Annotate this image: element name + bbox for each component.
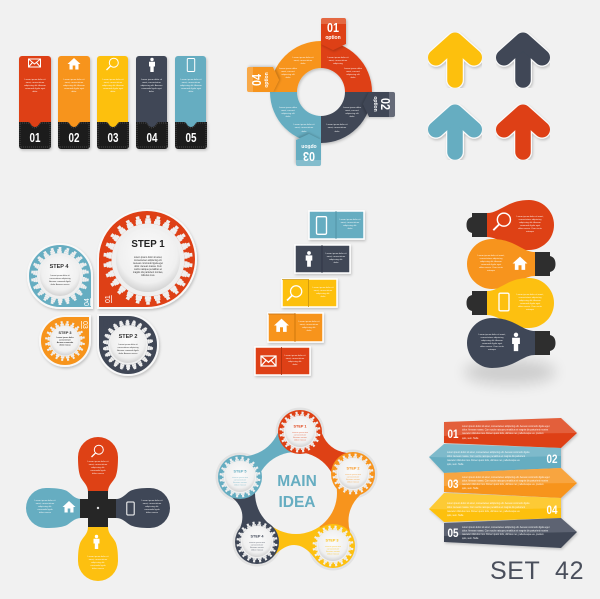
- tag 02: [58, 56, 90, 149]
- step 3 node: [311, 524, 355, 568]
- option tab 01: 01: [327, 20, 339, 35]
- ring labels: adipiscing elit: [281, 73, 295, 76]
- step 4 gear: consectetuer adipiscing: [50, 277, 70, 280]
- ribbon 02: [429, 444, 561, 473]
- connecting bands: [232, 432, 360, 558]
- bulb: red search: natoque: [526, 230, 535, 233]
- card: phone: dolor: [348, 227, 353, 230]
- petal: red search: Lorem ipsum dolor sit: [88, 460, 109, 463]
- node halos: [216, 408, 378, 570]
- petal: red search: [78, 437, 118, 492]
- ribbon 02: quis, sem. Nulla: [447, 464, 464, 466]
- tag 04: 04: [146, 131, 158, 145]
- petal: teal home: [26, 488, 81, 528]
- step 1 gear: magnis dis parturient montes,: [133, 271, 163, 274]
- step 1 node: Lorem ipsum dol: [292, 432, 308, 434]
- ribbon 01: [444, 418, 577, 448]
- card: home: [268, 313, 323, 342]
- card: mail: dolor: [293, 363, 298, 366]
- bulb: red search: Lorem ipsum dolor sit amet,: [516, 215, 544, 218]
- center blob: [255, 452, 337, 534]
- panel: circular four options chart: [247, 18, 395, 166]
- ribbon 03: dolor. Aenean massa. Cum sociis natoque penatibus et magnis dis parturient montes: [462, 480, 549, 482]
- petal: yellow person: dolor massa: [92, 567, 105, 570]
- card: phone: Lorem ipsum dolor sit: [340, 218, 361, 221]
- ring labels: amet, consectetuer: [294, 59, 313, 62]
- tag 04: dolor.: [149, 90, 155, 93]
- step 4 node: dolor massa: [251, 550, 264, 552]
- card: search: [282, 279, 337, 307]
- step 2 gear: Lorem ipsum dolor sit: [118, 343, 138, 346]
- tag 02: amet, consectetuer: [65, 81, 84, 84]
- step 4 gear: Aenean commodo ligula: [49, 280, 72, 283]
- ring labels: amet, consect: [281, 109, 295, 112]
- step 2 node: [331, 452, 375, 496]
- ring labels: amet, consectetuer: [328, 126, 347, 129]
- bulb shadow: [464, 359, 556, 385]
- ribbon 02: nascetur ridiculus mus. Donec quam felis, ultricies nec, pellentesque eu: [447, 459, 520, 462]
- ring segments: [270, 41, 372, 143]
- card: person: [295, 245, 350, 273]
- step 4 gear: [28, 244, 92, 308]
- step 1 gear: ridiculus mus.: [141, 274, 155, 277]
- tag 04: commodo ligula eget: [141, 87, 162, 90]
- bulb: orange home: adipiscing elit. Aenean: [480, 260, 503, 263]
- step 5 node: consectetuer: [234, 478, 246, 482]
- tag 02: dolor.: [71, 90, 77, 93]
- tag 03: commodo ligula eget: [103, 87, 123, 90]
- ribbon 05: 05: [448, 526, 459, 540]
- step 3 gear: Aenean commodo: [57, 341, 74, 344]
- arrow: teal: [436, 112, 474, 152]
- step 2 node: Lorem ipsum dol: [345, 474, 361, 476]
- step 3 node: dolor massa: [327, 554, 340, 556]
- option tab 02: [363, 92, 395, 117]
- ring labels: Lorem ipsum dolor: [279, 106, 297, 109]
- step 4 node: Aenean comm: [250, 546, 264, 549]
- ring labels: Lorem ipsum dolor sit: [327, 123, 348, 126]
- ring labels: [279, 56, 362, 133]
- tag 05: amet, consectetuer: [182, 81, 201, 84]
- option tab 01: option: [325, 35, 341, 41]
- ribbon 01: quis, sem. Nulla: [462, 438, 479, 440]
- panel: staircase cards: [255, 211, 364, 375]
- ring labels: Lorem ipsum dolor sit: [293, 56, 314, 59]
- ribbon 01: Lorem ipsum dolor sit amet, consectetuer adipiscing elit. Aenean commodo ligula eget: [462, 425, 550, 428]
- step 1 gear: 01: [105, 295, 112, 303]
- tag 03: 03: [108, 131, 119, 145]
- ring labels: dolor: [351, 76, 356, 79]
- step 1 gear: Lorem ipsum dolor sit amet,: [134, 256, 163, 259]
- option tab 03: 03: [303, 149, 315, 164]
- petal: red search: commodo ligula: [90, 470, 106, 472]
- tag 01: 01: [30, 131, 41, 145]
- bulb: red search: [466, 200, 554, 250]
- tag 01: [19, 56, 51, 149]
- ring labels: dolor: [350, 115, 355, 118]
- step 4 gear: dolor. Aenean massa: [51, 283, 70, 286]
- panel: cross of petals: [26, 437, 170, 581]
- tag 03: Lorem ipsum dolor sit: [103, 78, 124, 81]
- ring labels: amet, consect: [345, 109, 359, 112]
- ring labels: Lorem ipsum dolor: [279, 67, 297, 70]
- bulb: dark person: commodo ligula eget: [482, 342, 502, 345]
- step 2 gear: 02: [103, 319, 110, 327]
- petal: dark phone: [116, 488, 170, 528]
- option tab 01: [321, 18, 346, 50]
- bulb: orange home: consectetuer adipiscing: [480, 257, 503, 260]
- tag 05: [175, 56, 207, 149]
- panel: light bulbs: [464, 200, 556, 385]
- ribbon 01: dolor. Aenean massa. Cum sociis natoque penatibus et magnis dis parturient montes: [462, 428, 549, 432]
- card: home: adipiscing elit.: [302, 326, 316, 329]
- bulb: yellow phone: adipiscing elit. Aenean: [519, 299, 542, 302]
- bulb: dark person: Lorem ipsum dolor sit amet,: [478, 333, 506, 336]
- bulb: yellow phone: dolor massa. Cum sociis: [518, 305, 543, 308]
- step 2 gear: STEP 2: [119, 334, 137, 340]
- card: home: Lorem ipsum dolor sit: [299, 320, 320, 323]
- step 3 gear: consectetuer: [59, 338, 71, 342]
- step 1 gear: dolor. Aenean massa. Cum: [134, 265, 162, 268]
- bulb: dark person: dolor massa. Cum sociis: [480, 345, 505, 348]
- step 1 gear: STEP 1: [131, 239, 165, 250]
- step 1 node: Aenean comm: [293, 436, 307, 439]
- ring labels: dolor: [335, 130, 340, 133]
- ring labels: adipiscing elit: [345, 112, 359, 115]
- bulb: orange home: Lorem ipsum dolor sit amet,: [478, 254, 505, 257]
- arrow: yellow: [436, 40, 474, 80]
- tag 05: dolor.: [188, 90, 194, 93]
- step 4 gear: 04: [84, 298, 91, 306]
- tag 04: [136, 56, 168, 149]
- ribbon 04: dolor. Aenean massa. Cum sociis natoque penatibus et magnis dis parturient: [447, 506, 525, 509]
- ribbon 03: 03: [448, 477, 459, 491]
- ribbon 05: [444, 518, 577, 548]
- bulb: red search: consectetuer adipiscing: [519, 218, 542, 221]
- step 3 node: Lorem ipsum dol: [325, 546, 341, 548]
- step 2 node: dolor massa: [347, 482, 360, 484]
- main idea label: MAIN: [277, 473, 317, 490]
- ring labels: Lorem ipsum dolor: [344, 67, 362, 70]
- option tab 02: 02: [378, 98, 393, 110]
- ring labels: dolor: [286, 115, 291, 118]
- tag 02: commodo ligula eget: [64, 87, 84, 90]
- bulb: yellow phone: Lorem ipsum dolor sit amet,: [516, 293, 544, 296]
- step 3 gear: dolor massa: [59, 344, 72, 346]
- ring labels: amet, consectetuer: [329, 59, 348, 62]
- ring labels: dolor: [286, 76, 291, 79]
- step 2 node: STEP 2: [346, 466, 360, 470]
- card: search: Lorem ipsum dolor sit: [313, 286, 334, 289]
- ribbon 01: nascetur ridiculus mus. Donec quam felis, ultricies nec, pellentesque eu, pretium: [462, 432, 544, 435]
- step 3 node: consectetuer: [327, 548, 339, 550]
- tag 03: amet, consectetuer: [104, 81, 123, 84]
- ribbon 03: quis, sem. Nulla: [462, 488, 479, 490]
- ribbon 04: [429, 493, 561, 522]
- card: home: amet, consectetuer: [300, 323, 319, 326]
- arrow: dark: [504, 40, 542, 80]
- step 2 node: Aenean comm: [346, 478, 360, 481]
- bulb: red search: commodo ligula eget: [520, 224, 540, 227]
- bulb: orange home: natoque: [487, 269, 496, 272]
- petal: yellow person: commodo ligula: [90, 565, 106, 567]
- ring labels: adipiscing elit: [281, 112, 295, 115]
- petal: yellow person: amet, consectetuer: [89, 558, 108, 561]
- petal: teal home: commodo ligula: [37, 509, 53, 511]
- ribbon 03: nascetur ridiculus mus. Donec quam felis, ultricies nec, pellentesque eu, pretium: [462, 483, 544, 486]
- step 3 gear: Lorem ipsum dolor: [56, 337, 74, 339]
- petal: yellow person: adipiscing elit.: [91, 561, 105, 564]
- step 4 node: consectetuer: [251, 544, 263, 546]
- step 1 node: consectetuer: [294, 434, 306, 436]
- step 3 gear: [40, 316, 90, 366]
- panel: four arrows: [436, 40, 542, 152]
- option tab 03: option: [301, 143, 317, 149]
- tag 05: commodo ligula eget: [181, 87, 201, 90]
- step 2 gear: consectetuer adipiscing: [118, 346, 138, 349]
- ribbon 02: dolor. Aenean massa. Cum sociis natoque penatibus et magnis dis parturient: [447, 455, 525, 458]
- bulb: yellow phone: natoque: [526, 308, 535, 311]
- card: person: amet, consectetuer: [327, 255, 346, 258]
- tag 04: Lorem ipsum dolor sit: [141, 78, 162, 81]
- step 5 node: Aenean comm: [233, 481, 247, 484]
- step 3 node: Aenean comm: [326, 550, 340, 553]
- step 1 gear: sociis natoque penatibus et: [134, 268, 162, 271]
- petal: teal home: Lorem ipsum dolor sit: [35, 499, 56, 502]
- step 2 node: consectetuer: [347, 476, 359, 478]
- panel: ribbon arrows: [429, 418, 577, 548]
- bulb: red search: adipiscing elit. Aenean: [519, 221, 542, 224]
- card: mail: amet, consectetuer: [286, 357, 305, 360]
- ring labels: Lorem ipsum dolor sit: [328, 56, 349, 59]
- petal: yellow person: [78, 527, 118, 581]
- bulb: dark person: adipiscing elit. Aenean: [481, 339, 504, 342]
- ribbon 04: nascetur ridiculus mus. Donec quam felis, ultricies nec, pellentesque eu: [447, 510, 520, 513]
- step 5 node: STEP 5: [233, 470, 247, 474]
- ribbon 04: 04: [546, 503, 558, 517]
- step 3 gear: STEP 3: [58, 331, 72, 335]
- tag 03: dolor.: [110, 90, 116, 93]
- step 1 node: [278, 410, 322, 454]
- ring labels: amet, consect: [346, 70, 360, 73]
- tag 03: [97, 56, 129, 149]
- option tab 02: option: [372, 96, 378, 112]
- tag 01: Lorem ipsum dolor sit: [25, 78, 46, 81]
- step 2 gear: dolor. Aenean massa: [119, 352, 138, 355]
- petal: red search: amet, consectetuer: [89, 463, 108, 466]
- petal: teal home: amet, consectetuer: [36, 502, 55, 505]
- bulb: dark person: consectetuer adipiscing: [481, 336, 504, 339]
- card: person: Lorem ipsum dolor sit: [326, 252, 347, 255]
- step 1 node: dolor massa: [294, 440, 307, 442]
- ribbon 05: dolor. Aenean massa. Cum sociis natoque penatibus et magnis dis parturient montes: [462, 530, 549, 532]
- card: person: dolor: [334, 261, 339, 264]
- card: mail: [255, 347, 310, 375]
- petal: dark phone: commodo ligula: [144, 509, 160, 511]
- step 3 gear: 03: [81, 321, 88, 329]
- bulb: orange home: commodo ligula eget: [481, 263, 501, 266]
- ring labels: adipiscing elit: [346, 73, 360, 76]
- step 4 gear: Lorem ipsum dolor sit: [50, 274, 70, 277]
- step 5 node: [218, 455, 262, 499]
- ring labels: Lorem ipsum dolor sit: [294, 123, 315, 126]
- card: mail: adipiscing elit.: [288, 360, 302, 363]
- step 1 node: STEP 1: [293, 424, 307, 428]
- tag 01: adipiscing elit. Aenean: [24, 84, 47, 87]
- ribbon 03: [444, 468, 577, 498]
- ribbon 02: 02: [546, 452, 558, 466]
- step 2 gear: Aenean commodo ligula: [117, 349, 140, 352]
- petal: teal home: adipiscing elit.: [38, 505, 52, 508]
- option tab 04: [247, 67, 279, 92]
- step 5 node: dolor massa: [234, 484, 247, 486]
- bulb: orange home: dolor massa. Cum sociis: [479, 266, 504, 269]
- tag 01: amet, consectetuer: [26, 81, 45, 84]
- ring labels: Lorem ipsum dolor: [343, 106, 361, 109]
- tag 05: Lorem ipsum dolor sit: [181, 78, 202, 81]
- card: mail: Lorem ipsum dolor sit: [285, 354, 306, 357]
- tag 01: dolor.: [32, 90, 38, 93]
- ribbon 05: quis, sem. Nulla: [462, 538, 479, 540]
- panel: gear steps: [28, 210, 196, 375]
- ribbon 01: 01: [448, 427, 459, 441]
- petal: teal home: dolor massa: [39, 511, 52, 514]
- step 2 gear: [98, 315, 158, 375]
- option tab 04: 04: [249, 73, 264, 86]
- ribbon 04: quis, sem. Nulla: [447, 515, 464, 517]
- tag 02: Lorem ipsum dolor sit: [64, 78, 85, 81]
- step 4 node: Lorem ipsum dol: [249, 542, 265, 544]
- card: search: amet, consectetuer: [314, 289, 333, 292]
- step 1 gear: consectetuer adipiscing elit.: [134, 259, 162, 262]
- panel: numbered tags: [19, 56, 207, 149]
- card: person: adipiscing elit.: [329, 258, 343, 261]
- tag 01: commodo ligula eget: [25, 87, 45, 90]
- bulb: yellow phone: [466, 278, 554, 328]
- ribbon 02: Lorem ipsum dolor sit amet, consectetuer adipiscing elit. Aenean commodo ligula: [447, 451, 530, 454]
- tag 05: 05: [186, 131, 197, 145]
- ribbon 04: Lorem ipsum dolor sit amet, consectetuer adipiscing elit. Aenean commodo ligula: [447, 502, 530, 505]
- main idea label: IDEA: [278, 494, 316, 511]
- ribbon 03: Lorem ipsum dolor sit amet, consectetuer adipiscing elit. Aenean commodo ligula eget: [462, 476, 550, 479]
- petal: dark phone: Lorem ipsum dolor sit: [142, 499, 163, 502]
- bulb: orange home: [467, 239, 556, 289]
- ring labels: dolor: [301, 62, 306, 65]
- tag 02: adipiscing elit. Aenean: [63, 84, 86, 87]
- petal: dark phone: dolor massa: [146, 511, 159, 514]
- step 3 node: STEP 3: [325, 538, 339, 542]
- black center hub: [80, 491, 116, 527]
- tag 05: adipiscing elit. Aenean: [180, 84, 203, 87]
- title: SET 42: SET 42: [490, 557, 584, 585]
- ring labels: adipiscing: [333, 63, 344, 65]
- step 4 node: [235, 520, 279, 564]
- bulb: yellow phone: commodo ligula eget: [520, 302, 540, 305]
- step 1 gear: Aenean commodo ligula eget: [133, 262, 163, 265]
- option tab 04: option: [264, 72, 270, 88]
- tag 04: amet, consectetuer: [142, 81, 161, 84]
- tag 03: adipiscing elit. Aenean: [102, 84, 125, 87]
- petal: dark phone: adipiscing elit.: [145, 505, 159, 508]
- card: phone: adipiscing elit.: [343, 224, 357, 227]
- step 1 gear: [98, 210, 196, 308]
- option tab 03: [296, 134, 321, 166]
- ring labels: amet, consectetuer: [295, 126, 314, 129]
- card: phone: [309, 211, 364, 239]
- ribbon 05: nascetur ridiculus mus. Donec quam felis, ultricies nec, pellentesque eu, pretium: [462, 533, 544, 536]
- petal: dark phone: amet, consectetuer: [143, 502, 162, 505]
- bulb: red search: dolor massa. Cum sociis: [518, 227, 543, 230]
- bulb: dark person: natoque: [488, 348, 497, 351]
- tag 04: adipiscing elit. Aenean: [141, 84, 163, 87]
- step 4 gear: STEP 4: [50, 264, 69, 270]
- tag 02: 02: [68, 131, 80, 145]
- petal: red search: adipiscing elit.: [91, 466, 105, 469]
- ring labels: dolor: [302, 130, 307, 133]
- card: phone: amet, consectetuer: [341, 221, 360, 224]
- ribbon 05: Lorem ipsum dolor sit amet, consectetuer adipiscing elit. Aenean commodo ligula eget: [462, 526, 550, 529]
- card: home: dolor: [307, 329, 312, 332]
- card: search: dolor: [321, 295, 326, 298]
- panel: main idea cycle: [216, 408, 378, 570]
- ring labels: amet, consect: [281, 70, 295, 73]
- card: search: adipiscing elit.: [316, 292, 330, 295]
- bulb: yellow phone: consectetuer adipiscing: [519, 296, 542, 299]
- bulb: dark person: [467, 318, 556, 368]
- step 5 node: Lorem ipsum dol: [232, 477, 248, 479]
- petal: yellow person: Lorem ipsum dolor sit: [88, 555, 109, 558]
- arrow: red: [504, 112, 542, 152]
- petal: red search: dolor massa: [92, 472, 105, 475]
- step 4 node: STEP 4: [250, 534, 264, 538]
